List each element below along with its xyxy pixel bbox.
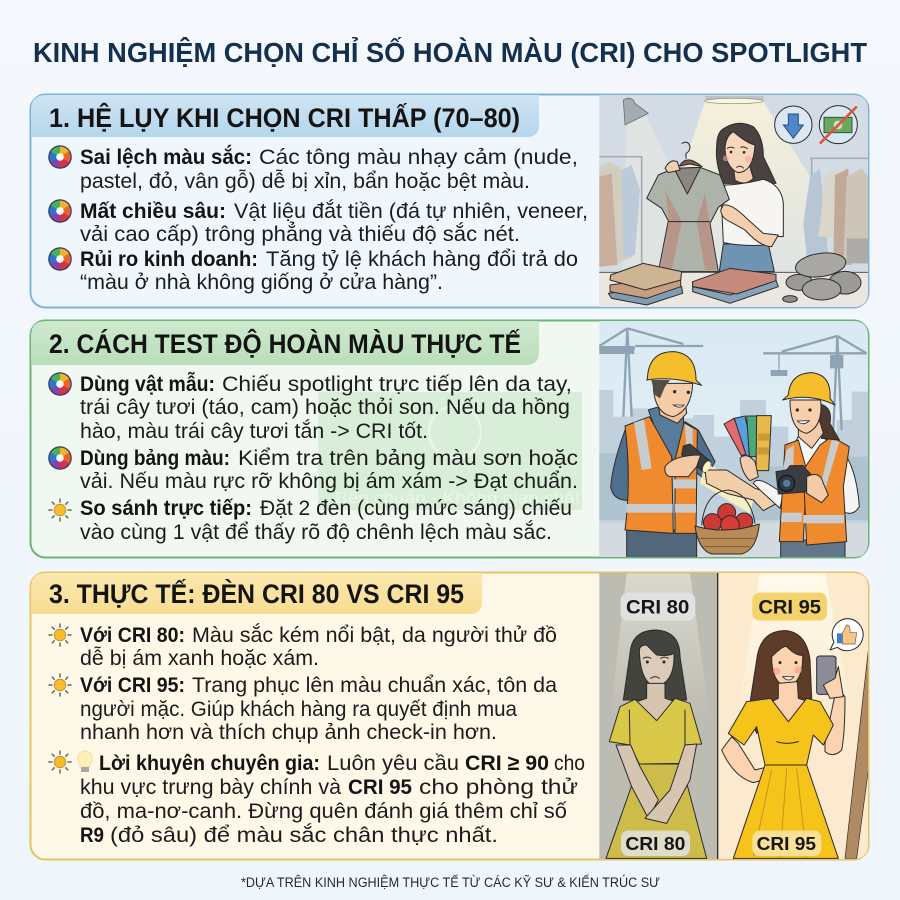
item: business risk (48, 247, 578, 294)
woman legs, arms (780, 540, 846, 557)
item: sample objects: hào, màu trái cây tươi tắn -> CRI tốt. (80, 418, 428, 443)
item: expert advice: khu vực trưng bày chính và (80, 775, 341, 799)
right CRI 95 scene (719, 570, 870, 860)
item: loss of depth: Vật liệu đắt tiền (đá tự nhiên, veneer, (234, 198, 588, 223)
heading: section 3 (31, 573, 482, 614)
item: color distortion (48, 144, 578, 193)
panel: real-world test (30, 320, 871, 560)
item: business risk: Rủi ro kinh doanh: (80, 247, 258, 271)
heading: section 2: 2. CÁCH TEST ĐỘ HOÀN MÀU THỰC TẾ (49, 329, 521, 359)
item: CRI 95: Với CRI 95: (80, 673, 185, 697)
item: expert advice: cho (554, 751, 585, 775)
item: color chart: Dùng bảng màu: (80, 446, 230, 470)
item: expert advice: Luôn yêu cầu (327, 751, 459, 775)
left rack (599, 157, 642, 263)
item: sample objects: trái cây tươi (táo, cam) hoặc thỏi son. Nếu da hồng (80, 395, 570, 419)
folded stack left (608, 287, 683, 305)
item: loss of depth (48, 198, 588, 246)
illustration: comparison of two women (599, 570, 870, 860)
item: CRI 95: nhanh hơn và thích chụp ảnh check-in hơn. (80, 720, 497, 744)
item: business risk: Tăng tỷ lệ khách hàng đổi trả do (266, 247, 578, 271)
woman arm (721, 205, 778, 247)
heading: section 3: 3. THỰC TẾ: ĐÈN CRI 80 VS CRI 95 (49, 579, 464, 609)
item: CRI 80: Với CRI 80: (80, 623, 185, 647)
item: CRI 95 (49, 673, 557, 744)
item: expert advice: CRI 95 (348, 775, 412, 799)
man vest (625, 417, 673, 533)
item: color distortion: Các tông màu nhạy cảm (nude, (259, 145, 578, 169)
illustration: shopper with dull dress (599, 93, 871, 310)
arm raised (825, 687, 845, 755)
cranes (599, 328, 703, 417)
item: loss of depth: Mất chiều sâu: (80, 199, 226, 223)
item: expert advice: (đỏ sâu) để màu sắc chân thực nhất. (110, 822, 498, 847)
man legs (627, 530, 697, 560)
stones (786, 274, 813, 290)
item: direct comparison: So sánh trực tiếp: (80, 496, 252, 520)
skyline (599, 390, 868, 560)
woman vest (779, 440, 807, 542)
item: sample objects: Chiếu spotlight trực tiếp lên da tay, (222, 372, 572, 396)
beam and arm (700, 463, 757, 513)
woman shirt (722, 179, 783, 245)
camera (776, 466, 812, 494)
flashlight and hand (682, 444, 711, 473)
label: CRI 95 top (752, 593, 827, 621)
woman head (820, 404, 840, 440)
item: expert advice: đồ, ma-nơ-canh. Đừng quên đánh giá thêm chỉ số (80, 799, 567, 823)
item: CRI 80: Màu sắc kém nổi bật, da người thử đồ (192, 622, 557, 647)
panel: low CRI consequences (30, 93, 871, 310)
label: CRI 95 top: CRI 95 (758, 597, 821, 618)
panel: CRI 80 vs CRI 95 (30, 570, 870, 860)
item: color chart (48, 446, 578, 493)
icon: light bulb (78, 751, 92, 772)
item: CRI 95: Trang phục lên màu chuẩn xác, tôn da (192, 673, 557, 697)
heading: section 1 (31, 95, 539, 137)
label: CRI 80 bottom: CRI 80 (625, 833, 685, 854)
footnote: *DỰA TRÊN KINH NGHIỆM THỰC TẾ TỪ CÁC KỸ SƯ & KIẾN TRÚC SƯ (241, 875, 660, 890)
man shirt and arm (610, 429, 628, 501)
heading: section 1: 1. HỆ LỤY KHI CHỌN CRI THẤP (70–80) (49, 103, 520, 133)
left CRI 80 scene (599, 570, 717, 860)
badge icons (775, 106, 812, 143)
watermark block: Bền chuẩn - Không gian chất (335, 489, 581, 507)
folded stack right (693, 280, 778, 303)
item: direct comparison: vào cùng 1 vật để thấy rõ độ chênh lệch màu sắc. (80, 519, 552, 544)
table (599, 273, 868, 307)
label: CRI 95 bottom (752, 831, 821, 856)
item: business risk: “màu ở nhà không giống ở cửa hàng”. (80, 270, 443, 294)
item: color distortion: pastel, đỏ, vân gỗ) dễ bị xỉn, bẩn hoặc bệt màu. (80, 168, 530, 193)
item: CRI 80: dễ bị ám xanh hoặc xám. (80, 645, 319, 670)
item: CRI 95: người mặc. Giúp khách hàng ra quyết định mua (80, 697, 517, 721)
item: color chart: vải. Nếu màu rực rỡ không bị ám xám -> Đạt chuẩn. (80, 469, 578, 493)
item: expert advice: CRI ≥ 90 (465, 751, 549, 775)
woman skirt (719, 244, 774, 272)
illustration: engineers testing color (599, 320, 871, 560)
label: CRI 80 top: CRI 80 (626, 597, 689, 618)
item: color distortion: Sai lệch màu sắc: (80, 144, 252, 169)
right rack (810, 158, 868, 176)
item: sample objects: Dùng vật mẫu: (80, 371, 215, 396)
item: expert advice (49, 751, 585, 847)
heading: section 2 (31, 321, 539, 365)
label: CRI 80 top (621, 593, 695, 621)
item: direct comparison (49, 496, 572, 544)
label: CRI 95 bottom: CRI 95 (757, 833, 816, 854)
title: KINH NGHIỆM CHỌN CHỈ SỐ HOÀN MÀU (CRI) CHO SPOTLIGHT (33, 36, 867, 68)
lamps (705, 96, 764, 103)
woman hand left (740, 456, 758, 481)
item: CRI 80 (49, 622, 557, 670)
dress (647, 167, 729, 272)
item: expert advice: R9 (80, 823, 104, 847)
label: CRI 80 bottom (621, 831, 690, 856)
item: sample objects (48, 371, 572, 443)
item: expert advice: Lời khuyên chuyên gia: (99, 751, 320, 775)
woman hair (716, 123, 776, 183)
item: loss of depth: vải cao cấp) trông phẳng và thiếu độ sắc nét. (80, 221, 520, 246)
item: expert advice: cho phòng thử (419, 775, 578, 799)
phone and thumbs-up bubble (817, 656, 836, 694)
woman neck and face (733, 165, 753, 183)
swatch fan (724, 416, 771, 471)
man head and helmet (658, 407, 688, 424)
watermark block (318, 392, 582, 510)
divider (717, 573, 718, 859)
item: direct comparison: Đặt 2 đèn (cùng mức sáng) chiếu (260, 496, 572, 520)
item: color chart: Kiểm tra trên bảng màu sơn hoặc (238, 446, 578, 470)
basket with apples (695, 490, 759, 554)
